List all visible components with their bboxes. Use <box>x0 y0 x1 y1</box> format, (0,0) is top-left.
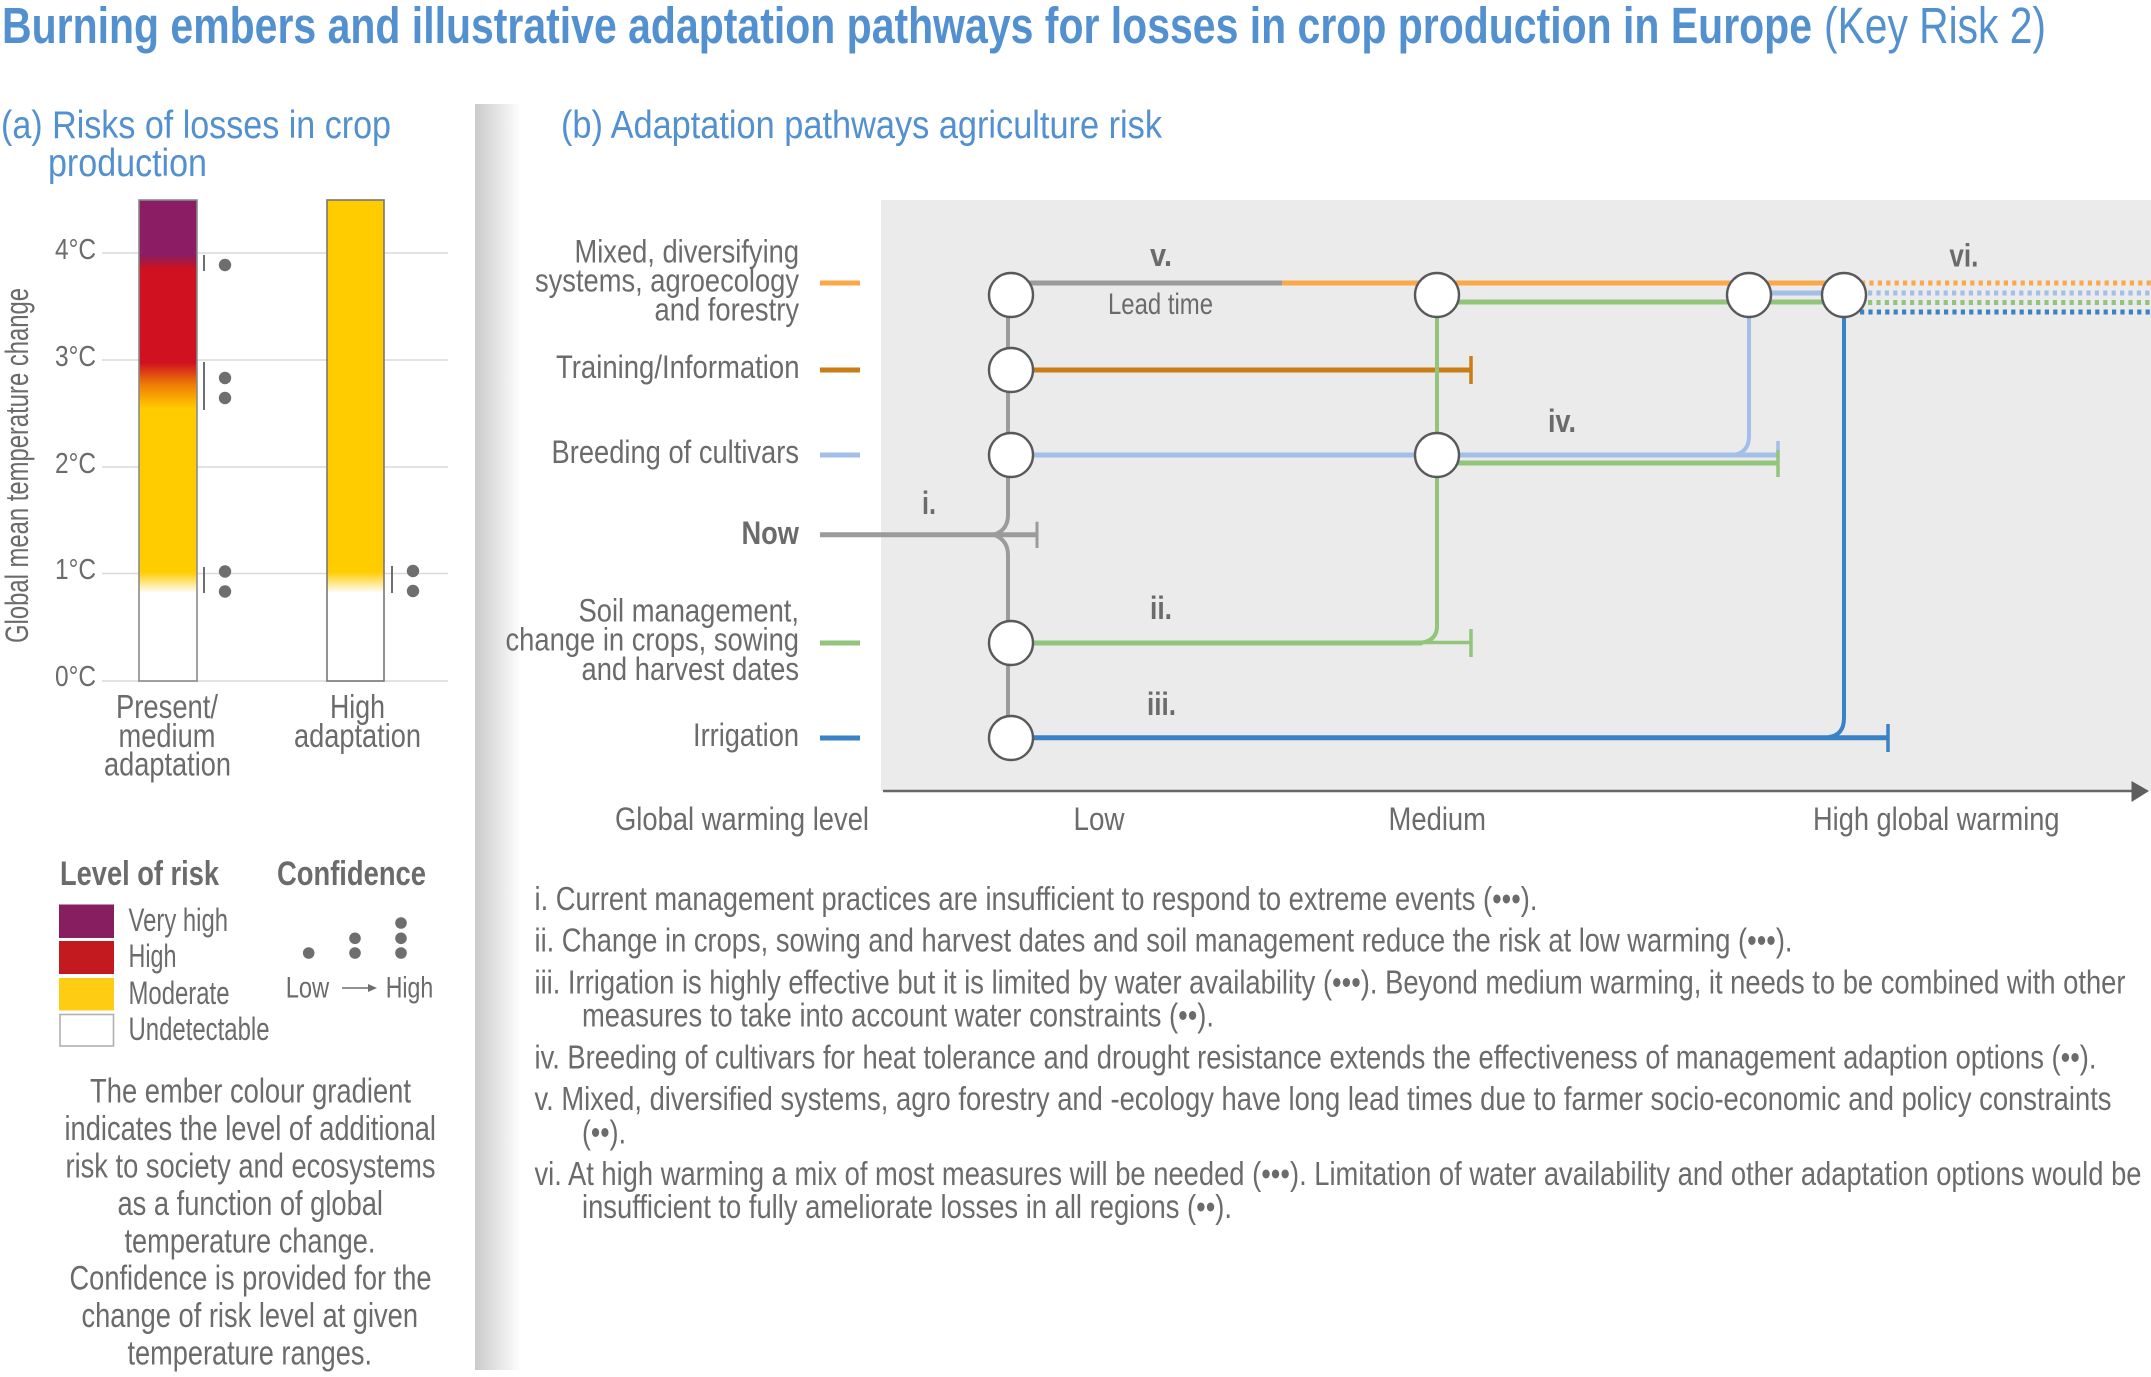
x axis with arrow <box>883 781 2149 802</box>
y axis gridlines and labels: 2°C <box>55 448 96 480</box>
explanatory text <box>64 1073 436 1373</box>
plot annotations: iii. <box>1147 686 1176 722</box>
legend: level of risk: High <box>128 938 176 974</box>
notes text block: ii. Change in crops, sowing and harvest dates and soil management reduce the risk at low warming (•••). <box>534 923 1792 960</box>
heading: panel a: production <box>48 142 207 185</box>
panel a: burning embers chart <box>0 200 448 784</box>
pathway option labels: systems, agroecology <box>535 263 799 299</box>
notes text block: (••). <box>582 1114 626 1151</box>
plot annotations: vi. <box>1949 238 1978 274</box>
x axis label: present/medium adaptation: adaptation <box>104 746 231 784</box>
irrigation line <box>1011 295 1888 752</box>
pathway option labels: change in crops, sowing <box>506 622 799 658</box>
y axis gridlines and labels: 0°C <box>55 661 96 693</box>
plot annotations: i. <box>922 485 936 521</box>
plot annotations: Lead time <box>1108 288 1213 321</box>
notes text block: insufficient to fully ameliorate losses in all regions (••). <box>582 1189 1232 1226</box>
heading: panel b: (b) Adaptation pathways agriculture risk <box>561 104 1162 147</box>
notes text block: i. Current management practices are insufficient to respond to extreme events (•••). <box>534 881 1538 918</box>
x axis label: high adaptation: adaptation <box>294 718 421 755</box>
x axis label: present/medium adaptation: medium <box>118 718 216 755</box>
explanatory text: as a function of global <box>118 1185 383 1223</box>
explanatory text: The ember colour gradient <box>90 1073 411 1111</box>
pathway option labels: and forestry <box>654 292 799 328</box>
x axis labels: Low <box>1074 801 1125 837</box>
legend: confidence: High <box>386 972 433 1004</box>
legend: level of risk: Very high <box>128 902 228 938</box>
pathway option labels: Now <box>742 515 799 551</box>
pathway option labels: Mixed, diversifying <box>574 234 799 270</box>
pathway option labels: Soil management, <box>578 593 799 629</box>
legend: confidence: Confidence <box>277 855 426 893</box>
plot annotations: iv. <box>1548 403 1576 439</box>
explanatory text: risk to society and ecosystems <box>66 1148 436 1186</box>
legend: level of risk: Level of risk <box>60 855 219 893</box>
pathway label colour keys <box>820 283 860 738</box>
training line <box>1011 356 1471 384</box>
explanatory text: temperature change. <box>124 1223 376 1261</box>
dotted high warming continuation <box>1860 283 2151 312</box>
legend: level of risk: Undetectable <box>128 1011 270 1047</box>
x axis label: present/medium adaptation <box>104 689 231 784</box>
confidence marks: present/medium adaptation <box>204 255 231 598</box>
ember bar: present/medium adaptation <box>139 200 197 681</box>
panel b: pathway plot background <box>881 200 2151 791</box>
pathway option labels: Irrigation <box>693 717 799 753</box>
plot annotations: ii. <box>1150 590 1172 626</box>
pathway option labels: and harvest dates <box>582 651 799 687</box>
pathways network <box>820 283 2151 752</box>
x axis labels <box>615 801 2060 837</box>
notes text block: measures to take into account water constraints (••). <box>582 998 1214 1035</box>
explanatory text: Confidence is provided for the <box>70 1260 432 1298</box>
y axis gridlines and labels <box>55 234 448 693</box>
pathway option labels: Breeding of cultivars <box>552 434 799 470</box>
soil management line <box>1011 295 1844 657</box>
x axis labels: High global warming <box>1813 801 2060 837</box>
heading: panel a <box>1 104 391 185</box>
legend: confidence <box>277 855 433 1004</box>
y axis gridlines and labels: 1°C <box>55 554 96 586</box>
legend: confidence: Low <box>286 972 329 1004</box>
x axis labels: Medium <box>1388 801 1486 837</box>
plot annotations <box>922 237 1978 722</box>
x axis label: high adaptation: High <box>330 689 385 726</box>
y axis title: Global mean temperature change <box>0 288 35 643</box>
mixed systems line: lead time and orange <box>1011 280 1861 286</box>
ember bar: high adaptation <box>327 200 384 681</box>
y axis gridlines and labels: 3°C <box>55 341 96 373</box>
confidence marks: high adaptation <box>392 565 419 597</box>
heading: panel a: (a) Risks of losses in crop <box>1 104 391 147</box>
x axis labels: Global warming level <box>615 801 869 837</box>
x axis label: present/medium adaptation: Present/ <box>116 689 219 726</box>
legend: level of risk <box>59 855 270 1047</box>
now line and grey trunk <box>820 295 1037 737</box>
pathway option labels: Training/Information <box>556 349 800 385</box>
pathway nodes <box>989 273 1866 760</box>
explanatory text: indicates the level of additional <box>64 1110 436 1148</box>
y axis gridlines and labels: 4°C <box>55 234 96 266</box>
pathway option labels <box>506 234 800 753</box>
panel divider shadow <box>475 104 521 1370</box>
explanatory text: change of risk level at given <box>82 1297 418 1335</box>
x axis label: high adaptation <box>294 689 421 755</box>
breeding line <box>1011 293 1844 455</box>
plot annotations: v. <box>1150 237 1172 273</box>
notes text block <box>534 881 2142 1226</box>
legend: level of risk: Moderate <box>128 975 230 1011</box>
explanatory text: temperature ranges. <box>128 1335 372 1373</box>
